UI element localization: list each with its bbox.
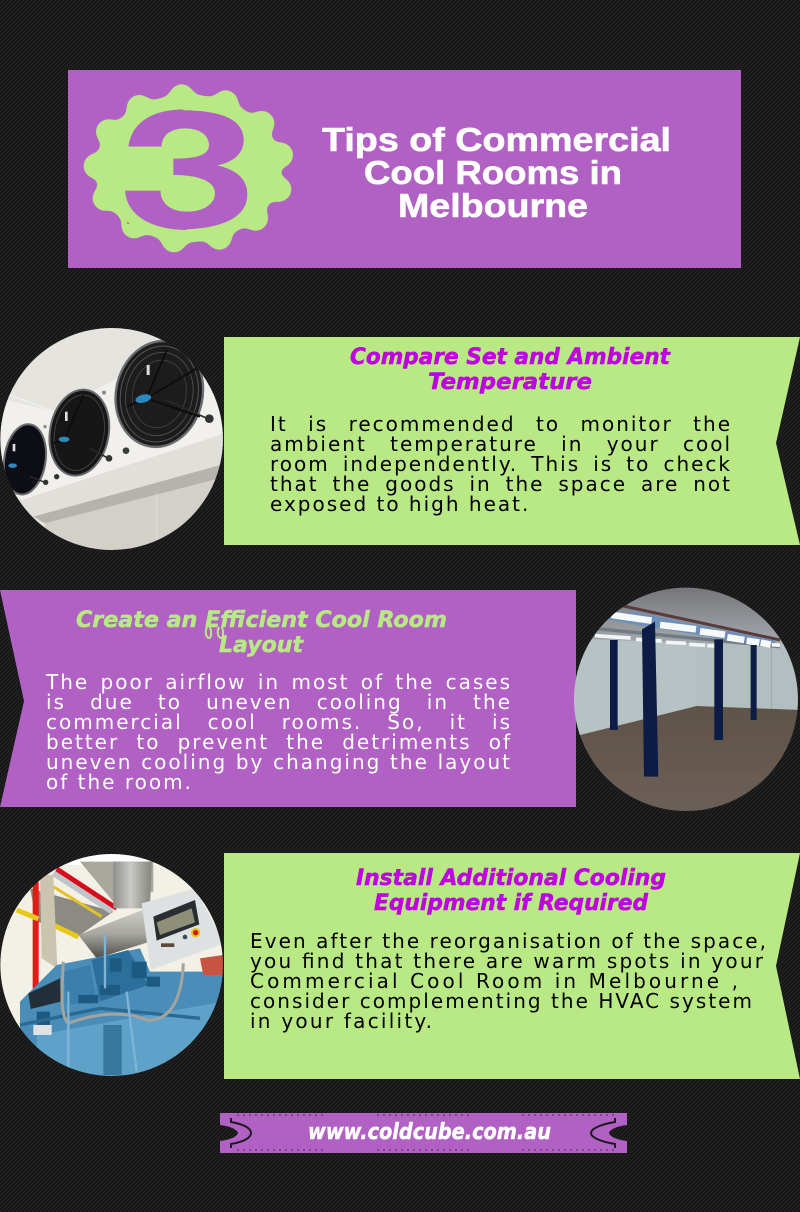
panel: compare set and ambient temperature bbox=[224, 337, 800, 545]
panel 3 heading: Install Additional Cooling bbox=[356, 866, 666, 891]
panel 3 body text: consider complementing the HVAC system bbox=[250, 989, 752, 1013]
panel 3 heading bbox=[356, 866, 666, 916]
panel 2 body text: commercial cool rooms. So, it is bbox=[46, 710, 512, 734]
photo: empty cool room with blue columns bbox=[574, 588, 798, 811]
panel 3 heading: Equipment if Required bbox=[374, 891, 648, 916]
panel 1 body text: that the goods in the space are not bbox=[270, 472, 732, 496]
panel 3 body text bbox=[250, 929, 766, 1033]
fans bbox=[0, 333, 214, 497]
panel 2 body text: The poor airflow in most of the cases bbox=[46, 670, 512, 694]
blue chiller body bbox=[20, 948, 222, 1048]
panel 1 heading: Temperature bbox=[428, 370, 592, 395]
panel 2 heading: Create an Efficient Cool Room bbox=[76, 608, 447, 633]
panel: install additional cooling equipment bbox=[224, 853, 800, 1079]
ribbon shape with notched ends bbox=[220, 1113, 627, 1153]
photo: blue industrial cooling machinery bbox=[0, 854, 223, 1076]
title: Melbourne bbox=[398, 187, 588, 224]
panel 2 heading bbox=[76, 608, 447, 658]
header banner bbox=[68, 70, 741, 268]
title: Tips of Commercial bbox=[322, 121, 671, 158]
panel 1 body text: room independently. This is to check bbox=[270, 452, 732, 476]
title bbox=[322, 121, 671, 224]
columns bbox=[610, 622, 757, 777]
panel 2 body text: better to prevent the detriments of bbox=[46, 730, 512, 754]
icon: gear badge with number 3 bbox=[83, 83, 293, 264]
panel 2 body text: of the room. bbox=[46, 770, 193, 794]
gear shape bbox=[83, 84, 293, 253]
purple ribbon bbox=[0, 590, 576, 807]
panel 1 body text bbox=[270, 412, 732, 516]
control panel bbox=[142, 888, 224, 970]
numeral 3: 3 bbox=[114, 83, 264, 264]
green ribbon bbox=[224, 853, 800, 1079]
panel 2 body text bbox=[46, 670, 512, 794]
panel: create an efficient cool room layout bbox=[0, 590, 576, 807]
banner background bbox=[68, 70, 741, 268]
panel 3 body text: Even after the reorganisation of the space, bbox=[250, 929, 766, 953]
panel 1 body text: It is recommended to monitor the bbox=[270, 412, 732, 436]
panel 3 body text: in your facility. bbox=[250, 1009, 432, 1033]
website url: www.coldcube.com.au bbox=[308, 1120, 551, 1145]
panel 2 body text: uneven cooling by changing the layout bbox=[46, 750, 512, 774]
panel 2 heading: Layout bbox=[219, 633, 304, 658]
panel 1 body text: ambient temperature in your cool bbox=[270, 432, 732, 456]
photo: evaporator fans on ceiling bbox=[0, 320, 227, 553]
panel 3 body text: you find that there are warm spots in your bbox=[250, 949, 764, 973]
panel 2 body text: is due to uneven cooling in the bbox=[46, 690, 512, 714]
green ribbon bbox=[224, 337, 800, 545]
footer ribbon with website bbox=[220, 1113, 627, 1153]
panel 1 heading: Compare Set and Ambient bbox=[350, 345, 671, 370]
panel 1 heading bbox=[350, 345, 671, 395]
panel 3 body text: Commercial Cool Room in Melbourne , bbox=[250, 969, 738, 993]
panel 1 body text: exposed to high heat. bbox=[270, 492, 530, 516]
title: Cool Rooms in bbox=[364, 154, 622, 191]
